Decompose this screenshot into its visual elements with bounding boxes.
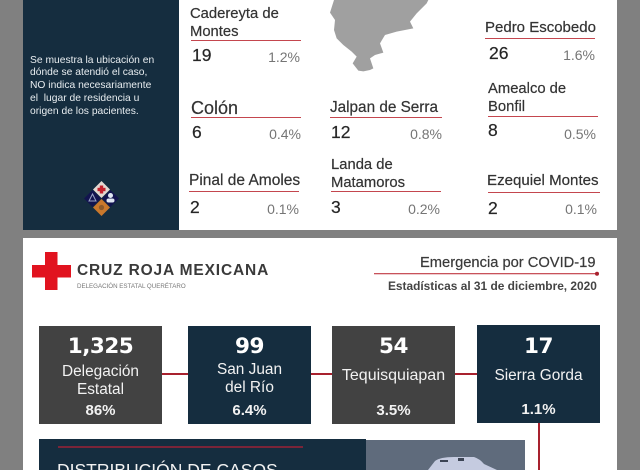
stat: Amealco de Bonfil [488,81,598,142]
stat: Pedro Escobedo [485,19,596,63]
stat: Colón: 6 [192,122,202,142]
card: Tequisquiapan [332,326,455,424]
card: Sierra Gorda: 1.1% [521,401,556,418]
stat: Jalpan de Serra [330,99,442,142]
text block: location note: origen de los pacientes. [30,106,139,117]
card: Tequisquiapan: Tequisquiapan [342,367,445,384]
text: statistics date: Estadísticas al 31 de diciembre, 2020 [388,279,597,293]
stat: Landa de Matamoros: Matamoros [331,175,405,191]
card: Sierra Gorda: 17 [524,334,553,359]
stat: Colón [191,98,301,142]
stat: Amealco de Bonfil: Bonfil [488,99,525,115]
card: Delegación Estatal [39,326,162,424]
stat: Ezequiel Montes: 2 [488,198,498,218]
stat: Ezequiel Montes: Ezequiel Montes [487,172,599,189]
stat: Cadereyta de Montes: Montes [190,24,239,40]
stat: Landa de Matamoros [331,157,441,217]
panel: map statistics [23,0,617,230]
stat: Cadereyta de Montes [190,6,301,65]
card: Tequisquiapan: 3.5% [376,402,411,419]
connector: first to second box [161,373,189,375]
text block: location note: NO indica necesariamente [30,80,151,91]
stat: Jalpan de Serra: Jalpan de Serra [330,99,438,116]
stat: Cadereyta de Montes: 1.2% [268,49,300,65]
text block: location note: dónde se atendió el caso, [30,67,147,78]
panel: case distribution banner [39,439,366,470]
stat: Pinal de Amoles: 0.1% [267,201,299,217]
stat: Pedro Escobedo: 26 [489,43,508,63]
card: Sierra Gorda [477,325,600,423]
divider with end dot [374,272,599,276]
stat: Landa de Matamoros: Landa de [331,157,393,173]
panel: ambulance photo [366,440,525,470]
icon: diamond emblem [84,181,119,216]
logo: red cross [32,252,71,290]
card: Tequisquiapan: 54 [379,334,408,359]
map: Querétaro silhouette [330,0,428,72]
card: Delegación Estatal: 86% [85,402,116,419]
text block: location note [30,54,154,117]
stat: Ezequiel Montes [487,172,600,218]
stat: Landa de Matamoros: 3 [331,197,341,217]
stat: Jalpan de Serra: 12 [331,122,350,142]
card: Delegación Estatal: Estatal [77,381,124,398]
stat: Amealco de Bonfil: 0.5% [564,126,596,142]
card: San Juan del Río: San Juan [217,361,282,378]
text block: location note: el lugar de residencia u [30,93,139,104]
connector: third to fourth box [454,373,479,375]
panel: navy sidebar [23,0,179,230]
stat: Jalpan de Serra: 0.8% [410,126,442,142]
stat: Cadereyta de Montes: 19 [192,45,211,65]
stat: Pinal de Amoles: Pinal de Amoles [189,172,300,189]
stat: Cadereyta de Montes: Cadereyta de [190,6,279,22]
card: San Juan del Río: 99 [235,334,264,359]
card: Delegación Estatal: Delegación [62,363,139,380]
text block: location note: Se muestra la ubicación en [30,54,154,66]
text: state delegation: DELEGACIÓN ESTATAL QUERÉTARO [77,283,186,290]
stat: Pinal de Amoles [189,172,300,217]
panel: lower report page [23,238,617,470]
card: San Juan del Río: 6.4% [232,402,267,419]
card: San Juan del Río: del Río [225,379,274,396]
stat: Pinal de Amoles: 2 [190,197,200,217]
heading: emergency title: Emergencia por COVID-19 [420,255,596,271]
stat: Amealco de Bonfil: Amealco de [488,81,566,97]
stat: Pedro Escobedo: Pedro Escobedo [485,19,596,36]
stat: Landa de Matamoros: 0.2% [408,201,440,217]
card: Delegación Estatal: 1,325 [68,334,133,359]
stat: Colón: Colón [191,98,238,118]
connector: down from Sierra Gorda [538,422,540,470]
card: Sierra Gorda: Sierra Gorda [494,367,583,384]
heading: Cruz Roja Mexicana: CRUZ ROJA MEXICANA [77,262,269,279]
stat: Ezequiel Montes: 0.1% [565,201,597,217]
stat: Amealco de Bonfil: 8 [488,120,498,140]
stat: Pedro Escobedo: 1.6% [563,47,595,63]
card: San Juan del Río [188,326,311,424]
stat: Colón: 0.4% [269,126,301,142]
connector: second to third box [310,373,334,375]
